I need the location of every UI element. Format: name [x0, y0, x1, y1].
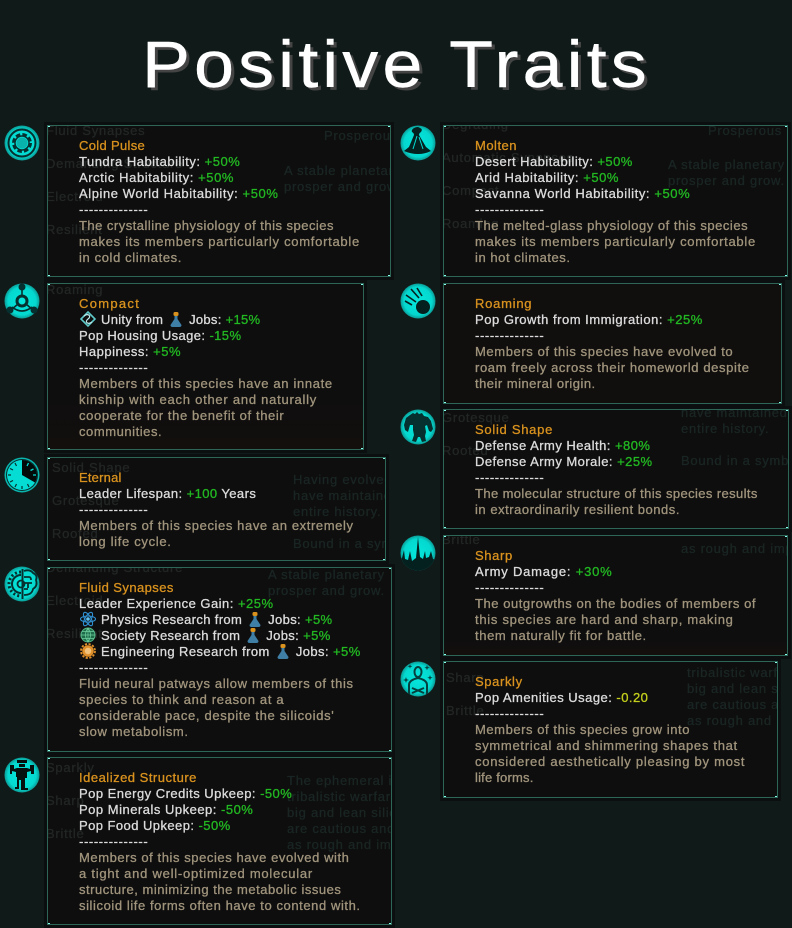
panel: Molten: Savanna World Habitability: +50%: [475, 186, 690, 201]
panel: Sparkly: Sparkly: [475, 674, 523, 689]
panel: Cold Pulse: makes its members particularly comfortable: [79, 234, 360, 249]
panel: Sharp: Sharp: [475, 548, 513, 563]
panel: Molten: Compact: [443, 183, 499, 198]
panel: Fluid Synapses: Fluid Synapses: [79, 580, 174, 595]
panel: Eternal: Leader Lifespan: +100 Years: [79, 486, 256, 501]
icon: Fluid Synapses brain: [4, 566, 40, 602]
panel: Cold Pulse: in cold climates.: [79, 250, 182, 265]
panel: Eternal: --------------: [79, 502, 148, 517]
panel: Solid Shape: Grotesque: [443, 410, 509, 425]
panel: Fluid Synapses: [47, 567, 392, 752]
panel: Solid Shape: --------------: [475, 470, 544, 485]
panel: Sparkly: [443, 661, 778, 798]
icon: Molten volcano: [400, 126, 436, 160]
panel: Fluid Synapses: --------------: [79, 660, 148, 675]
panel: Sparkly: tribalistic warf: [687, 665, 778, 680]
panel: Compact: Members of this species have an innate: [79, 376, 333, 391]
panel: Molten: [443, 125, 788, 277]
panel: Fluid Synapses: Engineering Research from Jobs: +5%: [101, 644, 361, 659]
panel: Solid Shape: in extraordinarily resilient bonds.: [475, 502, 680, 517]
panel: Molten: --------------: [475, 202, 544, 217]
panel: Fluid Synapses: considerable pace, despite the silicoids': [79, 708, 334, 723]
icon: Compact: [4, 284, 40, 318]
panel: Solid Shape: Rooted: [443, 443, 488, 458]
panel: Compact: Compact: [79, 296, 140, 311]
panel: Idealized Structure: Idealized Structure: [79, 770, 197, 785]
panel: Sparkly: considered aesthetically pleasing by most: [475, 754, 745, 769]
panel: Idealized Structure: Pop Food Upkeep: -50%: [79, 818, 231, 833]
panel: Fluid Synapses: Electroid: [47, 593, 103, 608]
panel: Idealized Structure: silicoid life forms often have to contend with.: [79, 898, 361, 913]
panel: Cold Pulse: The crystalline physiology of this species: [79, 218, 334, 233]
panel: Sharp: [443, 535, 788, 656]
panel: Molten: A stable planetary: [668, 157, 785, 172]
panel: Cold Pulse: Cold Pulse: [79, 138, 145, 153]
panel: Eternal: Grotesque: [52, 493, 119, 508]
panel: Roaming: their mineral origin.: [475, 376, 596, 391]
panel: Idealized Structure: Sharp: [47, 793, 84, 808]
panel: Solid Shape: [443, 409, 789, 529]
panel: Sparkly: as rough and: [687, 713, 772, 728]
panel: Idealized Structure: --------------: [79, 834, 148, 849]
panel: Sharp: this species are hard and sharp, making: [475, 612, 734, 627]
panel: Eternal: long life cycle.: [79, 534, 172, 549]
panel: Cold Pulse: [47, 125, 391, 277]
panel: Molten: Molten: [475, 138, 517, 153]
panel: Compact: communities.: [79, 424, 162, 439]
panel: Roaming: Pop Growth from Immigration: +25%: [475, 312, 703, 327]
panel: Sparkly: Pop Amenities Usage: -0.20: [475, 690, 648, 705]
icon: Sharp spires: [400, 536, 436, 570]
panel: Idealized Structure: [47, 757, 392, 925]
panel: Idealized Structure: a tight and well-optimized molecular: [79, 866, 313, 881]
panel: Molten: in hot climates.: [475, 250, 571, 265]
panel: Fluid Synapses: Resilient: [47, 626, 103, 641]
panel: Fluid Synapses: Leader Experience Gain: +25%: [79, 596, 273, 611]
panel: Cold Pulse: Electroid: [47, 189, 103, 204]
panel: Roaming: --------------: [475, 328, 544, 343]
panel: Roaming: Members of this species have evolved to: [475, 344, 733, 359]
panel: Sparkly: --------------: [475, 706, 544, 721]
title: Positive Traits: [142, 27, 651, 101]
panel: Sparkly: are cautious a: [687, 697, 778, 712]
panel: Compact: Unity from Jobs: +15%: [101, 312, 260, 327]
panel: Idealized Structure: Members of this species have evolved with: [79, 850, 349, 865]
panel: Compact: [47, 283, 364, 450]
panel: Sparkly: big and lean s: [687, 681, 778, 696]
panel: Fluid Synapses: Fluid neural patways allow members of this: [79, 676, 354, 691]
panel: Eternal: Solid Shape: [52, 460, 130, 475]
panel: Molten: Arid Habitability: +50%: [475, 170, 619, 185]
panel: Eternal: Eternal: [79, 470, 122, 485]
panel: Solid Shape: Defense Army Morale: +25%: [475, 454, 653, 469]
panel: Compact: --------------: [79, 360, 148, 375]
panel: Solid Shape: entire history.: [681, 421, 769, 436]
panel: Compact: Happiness: +5%: [79, 344, 181, 359]
panel: Compact: cooperate for the benefit of their: [79, 408, 284, 423]
panel: Compact: kinship with each other and naturally: [79, 392, 317, 407]
panel: Cold Pulse: Alpine World Habitability: +50%: [79, 186, 278, 201]
panel: Roaming: roam freely across their homeworld despite: [475, 360, 750, 375]
panel: Cold Pulse: Resilient: [47, 222, 103, 237]
panel: Fluid Synapses: prosper and grow.: [268, 583, 385, 598]
panel: Roaming: Roaming: [475, 296, 532, 311]
panel: Idealized Structure: Pop Energy Credits Upkeep: -50%: [79, 786, 292, 801]
panel: Idealized Structure: structure, minimizing the metabolic issues: [79, 882, 341, 897]
panel: Roaming: [443, 283, 782, 404]
icon: Idealized Structure robot: [4, 758, 40, 792]
panel: Solid Shape: Solid Shape: [475, 422, 553, 437]
panel: Cold Pulse: --------------: [79, 202, 148, 217]
panel: Fluid Synapses: species to think and reason at a: [79, 692, 284, 707]
panel: Molten: The melted-glass physiology of this species: [475, 218, 748, 233]
panel: Molten: Roaming: [443, 216, 499, 231]
panel: Cold Pulse: Demanding Structure: [47, 156, 183, 171]
panel: Fluid Synapses: slow metabolism.: [79, 724, 189, 739]
panel: Molten: Desert Habitability: +50%: [475, 154, 633, 169]
panel: Eternal: Rooted: [52, 526, 98, 541]
panel: Sharp: The outgrowths on the bodies of members of: [475, 596, 756, 611]
panel: Molten: Automatic Synapses: [443, 150, 574, 165]
panel: Molten: prosper and grow.: [668, 173, 785, 188]
panel: Solid Shape: The molecular structure of this species results: [475, 486, 758, 501]
panel: Solid Shape: Defense Army Health: +80%: [475, 438, 650, 453]
panel: Sparkly: Brittle: [446, 703, 484, 718]
panel: Sparkly: Sharp: [446, 670, 484, 685]
panel: Fluid Synapses: Physics Research from Jobs: +5%: [101, 612, 332, 627]
panel: Sparkly: life forms.: [475, 770, 534, 785]
icon: Sparkly figure: [400, 662, 436, 696]
panel: Cold Pulse: Tundra Habitability: +50%: [79, 154, 240, 169]
panel: Sharp: them naturally fit for battle.: [475, 628, 647, 643]
panel: Cold Pulse: Arctic Habitability: +50%: [79, 170, 234, 185]
panel: Sparkly: symmetrical and shimmering shapes that: [475, 738, 738, 753]
panel: Fluid Synapses: A stable planetary: [268, 567, 385, 582]
panel: Eternal: entire history.: [293, 504, 381, 519]
panel: Idealized Structure: Pop Minerals Upkeep: -50%: [79, 802, 253, 817]
panel: Molten: makes its members particularly comfortable: [475, 234, 756, 249]
panel: Idealized Structure: are cautious and: [287, 821, 392, 836]
panel: Idealized Structure: Sparkly: [47, 760, 95, 775]
icon: Cold Pulse gear: [4, 126, 40, 160]
panel: Compact: Pop Housing Usage: -15%: [79, 328, 241, 343]
panel: Eternal: [47, 457, 386, 561]
icon: Roaming comet: [400, 284, 436, 318]
panel: Sharp: Army Damage: +30%: [475, 564, 613, 579]
icon: Eternal clock: [4, 458, 40, 492]
panel: Sparkly: Members of this species grow into: [475, 722, 690, 737]
panel: Sharp: --------------: [475, 580, 544, 595]
icon: Solid Shape golem: [400, 410, 436, 444]
panel: Idealized Structure: Brittle: [47, 826, 84, 841]
panel: Fluid Synapses: Society Research from Jobs: +5%: [101, 628, 331, 643]
panel: Eternal: Members of this species have an extremely: [79, 518, 354, 533]
